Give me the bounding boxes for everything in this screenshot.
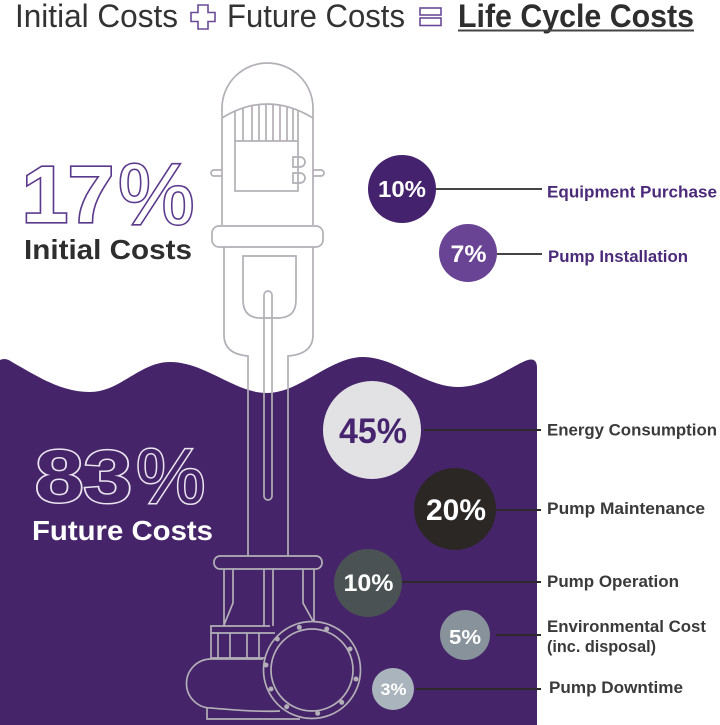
item: environmental cost: (inc. disposal) xyxy=(547,637,656,656)
83 percent outlined number: 83 xyxy=(35,435,132,518)
item: pump maintenance: 20% xyxy=(426,494,486,527)
item: pump downtime xyxy=(372,668,683,710)
initial costs label: Initial Costs xyxy=(24,234,192,265)
item: energy consumption: Energy Consumption xyxy=(547,420,717,440)
item: pump maintenance xyxy=(414,468,705,550)
item: equipment purchase: Equipment Purchase xyxy=(547,182,717,202)
icon: plus xyxy=(191,5,215,29)
initial costs stat xyxy=(22,147,194,265)
17 percent outlined number xyxy=(22,147,194,243)
83 percent outlined number xyxy=(35,432,205,520)
17 percent outlined number: % xyxy=(118,147,194,243)
item: pump operation: 10% xyxy=(344,570,394,597)
future costs label: Future Costs xyxy=(32,515,213,546)
item: energy consumption xyxy=(323,381,717,479)
item: pump installation: 7% xyxy=(450,241,486,268)
item: environmental cost: 5% xyxy=(449,627,481,649)
17 percent outlined number: 17 xyxy=(22,150,114,239)
item: equipment purchase: 10% xyxy=(378,176,426,202)
future costs stat xyxy=(32,432,213,546)
item: environmental cost: Environmental Cost xyxy=(547,617,706,636)
item: pump installation xyxy=(439,224,688,282)
pump illustration xyxy=(186,63,360,719)
pump motor housing xyxy=(211,63,324,247)
title underline xyxy=(458,30,694,32)
item: pump downtime: 3% xyxy=(380,680,406,699)
item: pump operation: Pump Operation xyxy=(547,572,679,591)
item: pump maintenance: Pump Maintenance xyxy=(547,499,705,518)
flange bolts xyxy=(264,625,358,716)
icon: equals xyxy=(420,8,441,26)
item: environmental cost xyxy=(440,610,706,660)
submerged pump base xyxy=(186,556,360,719)
item: equipment purchase xyxy=(368,155,717,223)
item: energy consumption: 45% xyxy=(339,412,407,451)
title equation xyxy=(15,0,694,34)
item: pump downtime: Pump Downtime xyxy=(549,678,683,697)
water panel xyxy=(0,357,537,725)
item: pump installation: Pump Installation xyxy=(548,247,688,266)
item: pump operation xyxy=(334,549,679,617)
pump column and shaft xyxy=(224,247,313,556)
83 percent outlined number: % xyxy=(136,432,205,520)
